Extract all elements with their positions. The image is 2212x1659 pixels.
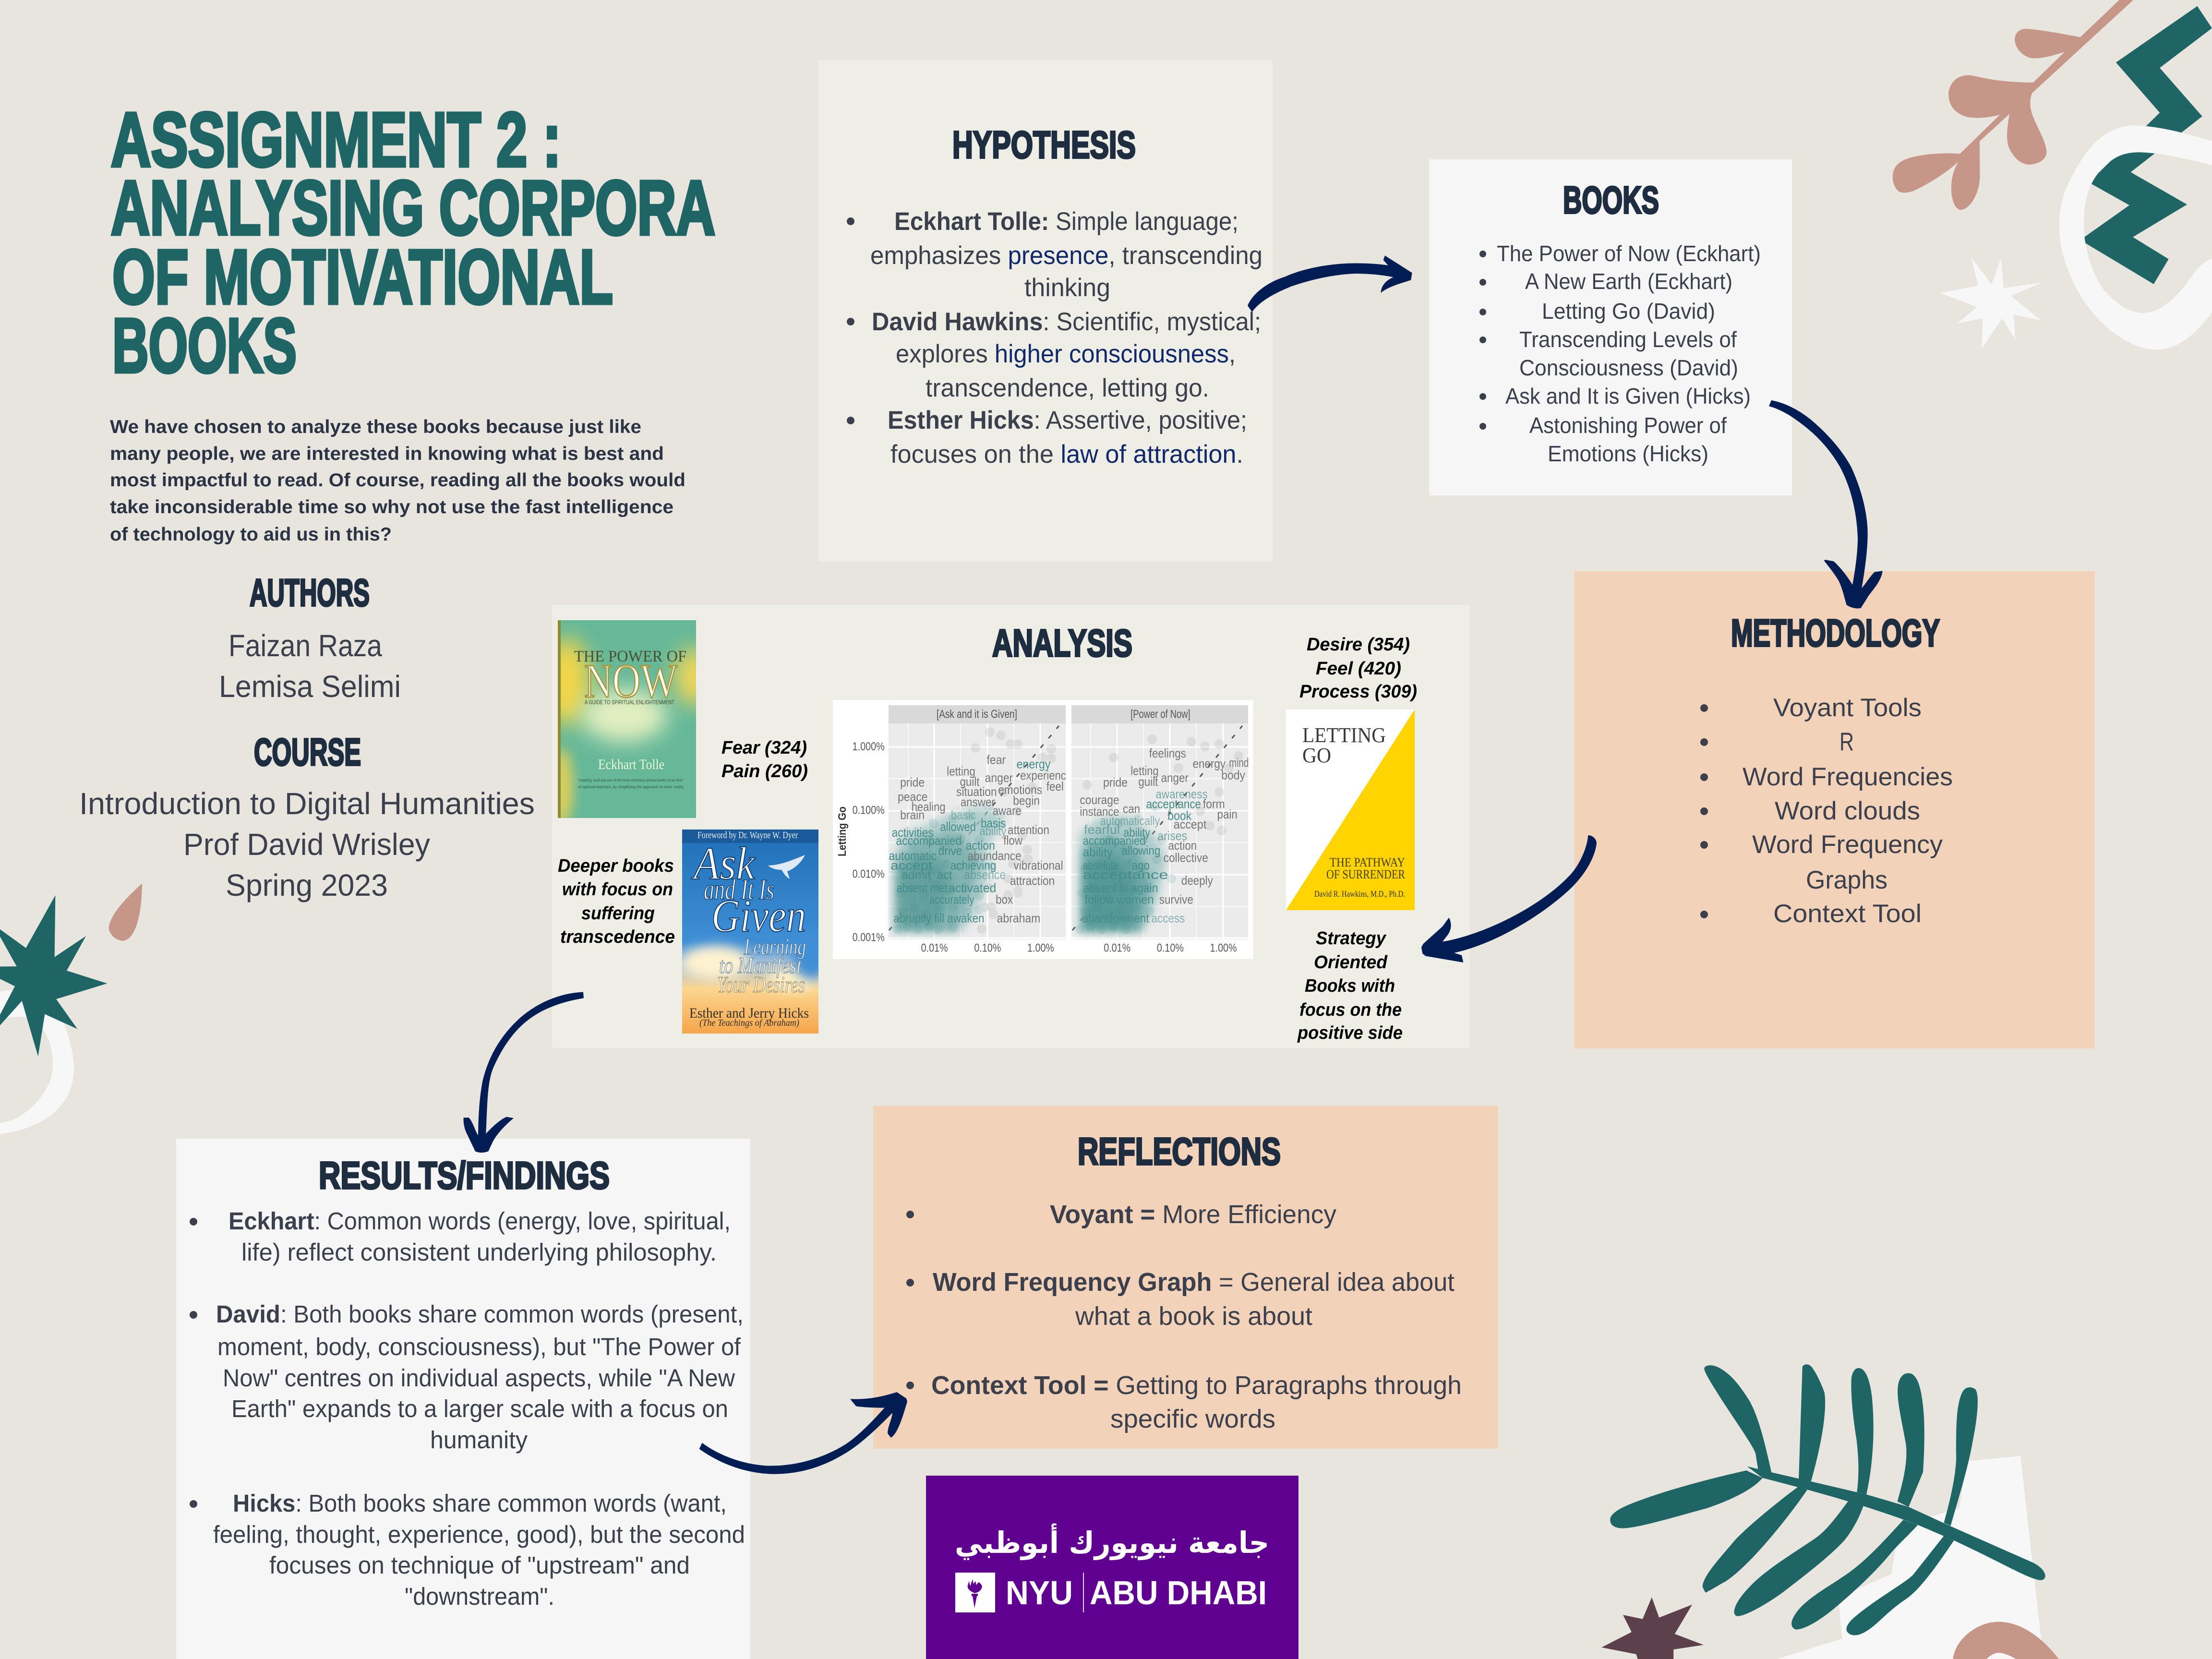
book cover: Letting Go: LETTING [1302,723,1386,747]
bullet list: reflections: Voyant = More Efficiency [1050,1200,1336,1229]
chart word labels: 0.01% [1104,941,1130,954]
chart word labels: acceptance [1083,867,1168,881]
chart word labels: guilt [1138,774,1158,789]
chart word labels: book [1167,808,1192,822]
bullet list: books: The Power of Now (Eckhart) [1497,241,1761,266]
intro paragraph: take inconsiderable time so why not use the fast intelligence [110,497,673,517]
bullet list: books: Transcending Levels of [1519,327,1737,352]
chart word labels: 1.00% [1027,941,1054,954]
chart word labels: allowing [1122,843,1160,857]
arrow: hypothesis to books [1248,255,1412,312]
book cover: Ask and It Is Given: (The Teachings of Abraham) [699,1018,799,1028]
chart word labels: accompanied [1083,833,1145,848]
book cover: Ask and It Is Given: to Manifest [719,953,802,978]
chart word labels: absent met [897,881,948,895]
label: desire, feel, process counts: Process (309) [1299,682,1417,702]
label: deeper books note: suffering [581,903,655,924]
label: deeper books note: Deeper books [558,856,674,876]
chart word labels: energy [1193,757,1226,770]
panel: analysis [542,605,1470,1048]
panel: books [1429,159,1792,495]
book cover: The Power of Now [558,620,696,818]
chart faded upper points [971,727,1243,934]
chart scatter points [893,802,1176,934]
bullet list: hypothesis: explores higher consciousness, [896,340,1236,368]
chart word labels: accurately [929,892,974,906]
bullet list: books: A New Earth (Eckhart) [1525,269,1732,294]
book cover: Letting Go: David R. Hawkins, M.D., Ph.D. [1314,889,1405,899]
bullet list: findings: Earth" expands to a larger scale with a focus on [231,1395,728,1422]
bullet list: findings: Eckhart: Common words (energy, love, spiritual, [228,1207,731,1235]
label: strategy oriented note: Strategy [1316,928,1387,949]
panel: methodology [1575,571,2095,1048]
chart word labels: ability [980,824,1006,838]
label: strategy oriented note [1297,928,1403,1043]
chart word labels: instance [1080,805,1119,818]
book cover: Letting Go [1286,709,1415,910]
label: strategy oriented note: positive side [1297,1023,1403,1043]
bullet list: hypothesis: David Hawkins: Scientific, mystical; [872,308,1261,336]
bullet list: methods: Word Frequencies [1743,763,1953,791]
chart word labels: 0.01% [921,941,948,954]
chart word labels: letting [1130,764,1159,778]
wordmark: Abu Dhabi: ABU DHABI [1090,1574,1267,1611]
chart word labels: allowed [940,819,976,833]
chart word labels: action [966,839,995,853]
chart word labels: pride [900,775,925,789]
bullet list: books: Letting Go (David) [1542,299,1715,324]
chart word labels: acceptance [1146,797,1201,811]
chart word labels: pain [1217,807,1238,821]
bullet list: books: Emotions (Hicks) [1548,441,1708,466]
bullet list: findings: "downstream". [405,1583,554,1610]
arrow: results to reflections [699,1392,907,1474]
intro paragraph: of technology to aid us in this? [110,524,392,545]
panel: reflections [873,1106,1498,1449]
chart word labels: ago [1132,858,1150,872]
chart: word frequency scatter: body [1221,768,1245,782]
icon: teal zigzag [2080,6,2212,284]
label: desire, feel, process counts: Feel (420) [1316,659,1401,679]
chart word labels: awareness [1155,787,1208,801]
chart word labels: feel [1046,780,1064,793]
chart word labels: admit [902,867,931,881]
chart word labels: 0.10% [1157,941,1184,954]
panel: analysis: mind [1229,756,1249,769]
title: BOOKS [112,302,297,388]
course block [79,731,535,902]
chart word labels: access [1152,911,1185,925]
label: deeper books note: with focus on [562,879,673,900]
bullet list: books: Ask and It is Given (Hicks) [1505,384,1751,409]
label: fear and pain counts: Fear (324) [721,738,807,758]
icon: bird [768,855,805,879]
book cover: Ask and It Is Given [682,830,830,1034]
chart word labels: collective [1164,851,1208,865]
chart word labels: aware [993,804,1022,817]
chart word labels: abruptly fill [893,911,944,925]
chart word labels: peace [898,790,927,804]
chart: word frequency scatter [833,700,1253,959]
heading: methodology: METHODOLOGY [1731,612,1940,654]
heading: reflections: REFLECTIONS [1078,1130,1281,1173]
chart word labels: awaken [947,911,984,925]
icon: pink drop [109,883,142,941]
decoration: left side shapes [0,883,142,1134]
intro paragraph: We have chosen to analyze these books because just like [110,417,641,437]
book cover: Ask and It Is Given: Esther and Jerry Hicks [689,1005,809,1021]
bullet list: methods: Graphs [1806,866,1887,894]
chart word labels: basis [981,816,1006,830]
chart word labels: 0.001% [853,931,885,944]
bullet list: books [1479,241,1761,466]
chart word labels: letting [947,764,975,778]
chart word labels: abraham [997,911,1040,925]
icon: maroon star [1601,1597,1704,1659]
book cover: The Power of Now: Eckhart Tolle [598,757,664,772]
chart word labels: pride [1103,775,1128,789]
icon: pink arch [1953,1622,2059,1659]
label: desire, feel, process counts: Desire (354) [1307,635,1410,655]
icon: torch [955,1573,995,1612]
book cover: The Power of Now: NOW [584,654,677,708]
label: fear and pain counts: Pain (260) [721,761,808,781]
chart word labels: accept [890,858,932,872]
chart word labels: accompanied [896,833,962,848]
bullet list: reflections: Word Frequency Graph = General idea about [933,1268,1455,1297]
chart word labels: act [937,867,952,881]
chart word labels: flow [1003,833,1022,847]
chart word labels: courage [1080,793,1119,807]
chart word labels: 0.10% [974,941,1001,954]
icon: white ribbon [2059,125,2212,349]
bullet list: findings: Now" centres on individual aspects, while "A New [223,1364,735,1392]
bullet list: hypothesis: emphasizes presence, transcending [870,241,1262,270]
panel: hypothesis [818,60,1273,562]
chart word labels: 0.100% [853,804,885,817]
icon: white star [1940,257,2043,349]
title: ASSIGNMENT 2 : [111,96,561,182]
chart word labels: anger [1161,771,1189,785]
book cover: Ask and It Is Given: Learning [744,934,806,960]
book cover: The Power of Now: of spiritual teachers, by simplifying the approach to inner reality [578,785,684,789]
icon: white paper shape [1777,1456,2044,1659]
title: ANALYSING CORPORA [111,165,715,251]
book cover: Letting Go: GO [1302,744,1331,767]
authors block: Faizan Raza [228,628,382,663]
chart word labels: 0.010% [853,867,885,880]
label: deeper books note: transcedence [560,927,675,947]
chart word labels: vibrational [1013,858,1063,872]
icon: teal star [0,895,107,1057]
chart word labels: abandonment [1082,911,1149,925]
book cover: The Power of Now: "Inspiring, lucid and one of the most refreshing spiritual books of our time" [578,778,684,782]
chart word labels: fear [986,753,1006,767]
chart density blobs [894,806,1166,932]
bullet list: methods: Voyant Tools [1773,694,1922,722]
chart word labels: achieving [950,858,996,872]
chart word labels: emotions [998,782,1042,796]
bullet list: hypothesis: transcendence, letting go. [926,374,1209,402]
chart word labels: anger [985,771,1013,785]
heading: books: BOOKS [1563,179,1659,221]
intro paragraph [110,417,685,545]
heading: authors: AUTHORS [250,571,370,614]
chart word labels: drive [938,844,962,858]
chart word labels: guilt [960,774,980,789]
bullet list: findings: humanity [430,1426,528,1454]
chart word labels: follow women [1084,892,1154,906]
chart word labels: absolute [1083,858,1118,872]
bullet list: findings: David: Both books share common words (present, [216,1300,744,1328]
chart word labels [853,708,1249,954]
title: OF MOTIVATIONAL [112,234,613,320]
panel: results and findings [176,1139,750,1659]
bullet list: reflections: specific words [1110,1405,1275,1433]
book cover: The Power of Now: A GUIDE TO SPIRITUAL ENLIGHTENMENT [585,699,675,706]
book cover: Ask and It Is Given: Ask [691,838,756,889]
chart word labels: can [1123,802,1140,816]
book cover: Letting Go: OF SURRENDER [1326,867,1406,881]
book cover: The Power of Now: THE POWER OF [574,648,686,665]
chart word labels: ability [1083,845,1113,859]
icon: white ring [0,989,74,1134]
authors block [219,571,401,704]
chart word labels: basic [951,808,976,822]
bullet list: methods: Context Tool [1773,900,1922,928]
bullet list: reflections: Context Tool = Getting to Paragraphs through [931,1371,1462,1400]
heading: hypothesis: HYPOTHESIS [952,123,1136,166]
intro paragraph: many people, we are interested in knowing what is best and [110,444,664,464]
book cover: Ask and It Is Given: Given [711,890,806,941]
chart word labels: automatic [889,849,937,863]
label: strategy oriented note: Books with [1305,976,1395,996]
arabic wordmark: جامعة نيويورك أبوظبي [955,1523,1269,1560]
authors block: Lemisa Selimi [219,669,401,704]
wordmark: NYU: NYU [1006,1574,1073,1611]
icon: teal fern leaf [1610,1364,2045,1635]
label: strategy oriented note: focus on the [1299,1000,1402,1020]
bullet list: books: Astonishing Power of [1529,413,1727,438]
chart word labels: begin [1013,793,1040,807]
chart word labels: box [996,892,1013,906]
bullet list: methods: Word Frequency [1752,830,1943,859]
chart word labels: ability [1123,825,1150,840]
book cover: Ask and It Is Given: Foreword by Dr. Wayne W. Dyer [697,830,798,841]
chart word labels: energy [1017,757,1051,771]
intro paragraph: most impactful to read. Of course, reading all the books would [110,470,685,491]
chart word labels: action [1168,839,1197,853]
chart word labels: activated [949,881,996,895]
chart word labels: arises [1157,829,1187,843]
icon: pink branch [1893,0,2133,210]
bullet list: hypothesis: Eckhart Tolle: Simple language; [894,207,1238,236]
chart word labels: deeply [1181,873,1213,888]
bullet list: methods: R [1839,728,1854,756]
label: desire, feel, process counts [1299,635,1417,702]
bullet list: reflections [906,1200,1462,1433]
title [111,96,715,388]
chart word labels: [Power of Now] [1130,708,1190,721]
chart word labels: answer [961,795,995,809]
chart word labels: [Ask and it is Given] [937,708,1017,721]
book cover: Letting Go: THE PATHWAY [1330,855,1405,869]
chart facet backgrounds [889,705,1248,939]
chart word labels: brain [900,808,925,822]
label: fear and pain counts [721,738,808,781]
label: deeper books note [558,856,675,947]
chart word labels: attraction [1010,874,1055,888]
decoration: top right shapes [1893,0,2212,349]
bullet list: reflections: what a book is about [1075,1302,1312,1331]
chart word labels: fearful [1084,822,1120,836]
bullet list: hypothesis: Esther Hicks: Assertive, positive; [888,406,1247,434]
book cover: Ask and It Is Given: and It Is [704,874,774,905]
decoration: bottom right shapes [1601,1364,2059,1659]
chart word labels: survive [1159,892,1193,906]
chart word labels: absence [964,867,1006,881]
bullet list: methods: Word clouds [1775,797,1920,825]
bullet list: hypothesis [847,207,1262,469]
bullet list: hypothesis: focuses on the law of attraction. [890,440,1243,469]
course block: Spring 2023 [226,868,388,902]
chart word labels: automatically [1100,814,1160,828]
bullet list: findings: feeling, thought, experience, good), but the second [213,1521,745,1548]
bullet list: findings: focuses on technique of "upstream" and [269,1551,690,1579]
bullet list: findings [190,1207,745,1610]
chart word labels: feelings [1149,746,1186,760]
chart word labels: attention [1008,823,1049,837]
heading: course: COURSE [254,731,361,773]
chart word labels: form [1203,797,1225,811]
bullet list: books: Consciousness (David) [1519,355,1738,380]
heading: results: RESULTS/FINDINGS [319,1154,610,1197]
chart word labels: abundance [968,849,1022,863]
chart word labels: accept [1174,817,1206,831]
bullet list: hypothesis: thinking [1024,274,1110,302]
arrow: methodology to analysis [1421,835,1597,962]
bullet list: methods [1700,694,1953,928]
chart y axis title: Letting Go [836,806,848,856]
chart word labels: absent fit again [1083,881,1158,895]
chart word labels: 1.000% [853,740,885,753]
course block: Prof David Wrisley [183,827,430,862]
bullet list: findings: moment, body, consciousness), but "The Power of [217,1333,741,1360]
arrow: books to methodology [1769,400,1883,608]
logo: NYU Abu Dhabi [926,1476,1298,1659]
course block: Introduction to Digital Humanities [79,786,535,821]
chart word labels: experienc [1020,769,1066,782]
label: strategy oriented note: Oriented [1314,952,1388,973]
bullet list: findings: Hicks: Both books share common words (want, [233,1490,727,1517]
chart word labels: healing [912,800,946,814]
book cover: Ask and It Is Given: Your Desires [717,972,805,998]
chart word labels: situation [956,785,997,799]
heading: analysis: ANALYSIS [992,622,1132,664]
chart word labels: activities [892,825,934,840]
arrow: analysis to results [464,992,584,1153]
bullet list: findings: life) reflect consistent underlying philosophy. [241,1238,717,1266]
chart word labels: 1.00% [1210,941,1237,954]
